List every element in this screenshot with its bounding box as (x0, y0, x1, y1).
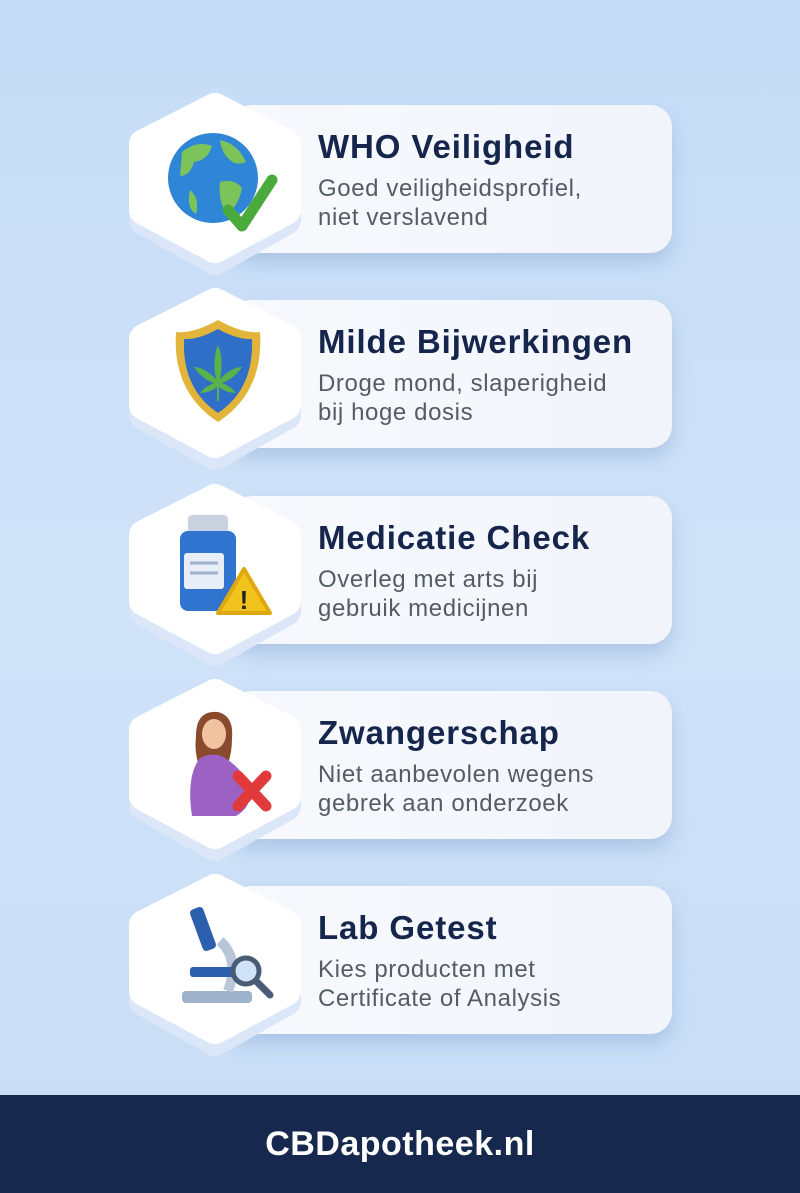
text block: Niet aanbevolen wegens (318, 761, 594, 788)
card background (230, 886, 672, 1034)
heading: WHO Veiligheid (318, 128, 574, 165)
text block: gebrek aan onderzoek (318, 790, 569, 817)
text block: gebruik medicijnen (318, 595, 529, 622)
text block: Droge mond, slaperigheid (318, 370, 607, 397)
panel: Zwangerschap (129, 678, 678, 861)
text block: bij hoge dosis (318, 399, 473, 426)
heading: Lab Getest (318, 909, 498, 946)
text block: Goed veiligheidsprofiel, (318, 175, 582, 202)
footer (0, 1095, 800, 1193)
icon: pregnant woman with red cross (129, 678, 301, 861)
panel: Milde Bijwerkingen (129, 288, 678, 470)
text block: Kies producten met (318, 956, 536, 983)
card background (230, 300, 672, 448)
text block (318, 956, 561, 1012)
text block (318, 761, 594, 817)
card background (230, 105, 672, 253)
icon: medicine bottle with warning (129, 484, 301, 666)
text block (318, 175, 582, 231)
text block (318, 566, 538, 622)
footer: CBDapotheek.nl (265, 1125, 535, 1163)
panel: Medicatie Check (129, 484, 678, 666)
heading: Zwangerschap (318, 714, 560, 751)
heading: Milde Bijwerkingen (318, 323, 633, 360)
icon: shield with leaf (129, 288, 301, 470)
panel: WHO Veiligheid (129, 92, 678, 275)
icon: medicine bottle with warning: ! (240, 585, 248, 615)
text block (318, 370, 607, 426)
icon: globe with check (129, 92, 301, 275)
text block: niet verslavend (318, 204, 488, 231)
icon: microscope with magnifier (129, 874, 301, 1056)
panel: Lab Getest (129, 874, 678, 1056)
card background (230, 496, 672, 644)
text block: Overleg met arts bij (318, 566, 538, 593)
text block: Certificate of Analysis (318, 985, 561, 1012)
heading: Medicatie Check (318, 519, 590, 556)
card background (230, 691, 672, 839)
